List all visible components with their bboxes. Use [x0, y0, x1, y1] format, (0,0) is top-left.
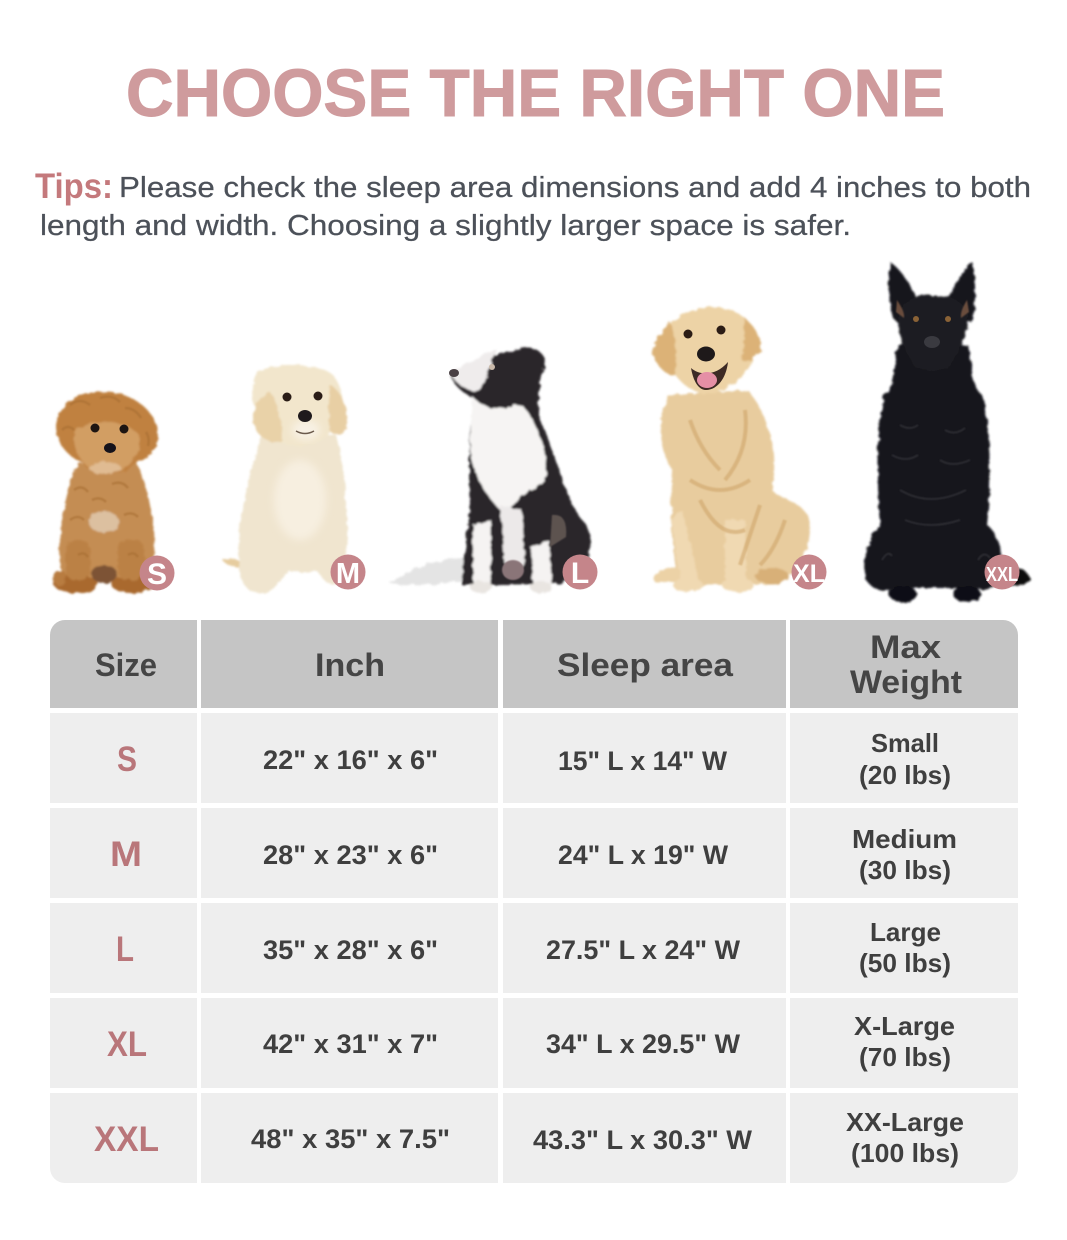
row M: 24" L x 19" W: [558, 840, 728, 870]
badge XXL: [984, 554, 1020, 590]
badge L: [562, 554, 598, 590]
table cells background: [50, 620, 1018, 1183]
dog S: curly poodle: [53, 392, 158, 593]
row L: 35" x 28" x 6": [263, 935, 438, 965]
badge XXL: XXL: [986, 564, 1018, 586]
badge S: S: [147, 558, 167, 591]
row L: [116, 917, 951, 978]
row S: S: [117, 740, 137, 779]
row L: 27.5" L x 24" W: [546, 935, 741, 965]
row XXL: XX-Large: [846, 1107, 964, 1137]
badge L: L: [571, 557, 589, 590]
table header row: Weight: [850, 664, 962, 700]
row XL: XL: [107, 1025, 147, 1064]
row XL: 34" L x 29.5" W: [546, 1029, 741, 1059]
table header row: Size: [95, 647, 157, 683]
table header row: [95, 629, 962, 700]
row XXL: (100 lbs): [851, 1138, 959, 1168]
row M: M: [110, 835, 142, 874]
table header row: Inch: [315, 647, 385, 683]
table header row: Max: [870, 629, 941, 665]
row M: Medium: [852, 824, 957, 854]
badge XL: XL: [793, 560, 825, 588]
dog XXL: black shepherd: [865, 262, 1031, 602]
row S: (20 lbs): [859, 760, 951, 790]
row XXL: 43.3" L x 30.3" W: [533, 1125, 753, 1155]
row XXL: XXL: [94, 1120, 159, 1159]
row S: 22" x 16" x 6": [263, 745, 438, 775]
row XXL: [94, 1107, 964, 1168]
row S: 15" L x 14" W: [558, 746, 727, 776]
row XL: (70 lbs): [859, 1042, 951, 1072]
row S: Small: [871, 728, 939, 758]
badge M: [330, 554, 366, 590]
row L: (50 lbs): [859, 948, 951, 978]
tips label: Tips:: [35, 167, 113, 206]
row M: [110, 824, 957, 885]
row L: Large: [870, 917, 941, 947]
row M: (30 lbs): [859, 855, 951, 885]
row M: 28" x 23" x 6": [263, 840, 438, 870]
dog XL: golden retriever: [653, 307, 810, 592]
badge M: M: [336, 558, 360, 590]
dog L: border collie: [390, 347, 591, 593]
row S: [117, 728, 951, 790]
tips text block: [35, 167, 1031, 242]
row XL: [107, 1011, 955, 1072]
row L: L: [116, 930, 134, 969]
table header row: Sleep area: [557, 647, 733, 683]
row XL: 42" x 31" x 7": [263, 1029, 438, 1059]
row XL: X-Large: [854, 1011, 955, 1041]
tips line 1: Please check the sleep area dimensions and add 4 inches to both: [119, 172, 1031, 204]
badge S: [140, 556, 174, 591]
row XXL: 48" x 35" x 7.5": [251, 1124, 450, 1154]
title: CHOOSE THE RIGHT ONE: [126, 56, 945, 131]
dog M: cream puppy: [222, 365, 348, 593]
tips line 2: length and width. Choosing a slightly larger space is safer.: [40, 210, 851, 242]
size table: [50, 620, 1018, 1183]
